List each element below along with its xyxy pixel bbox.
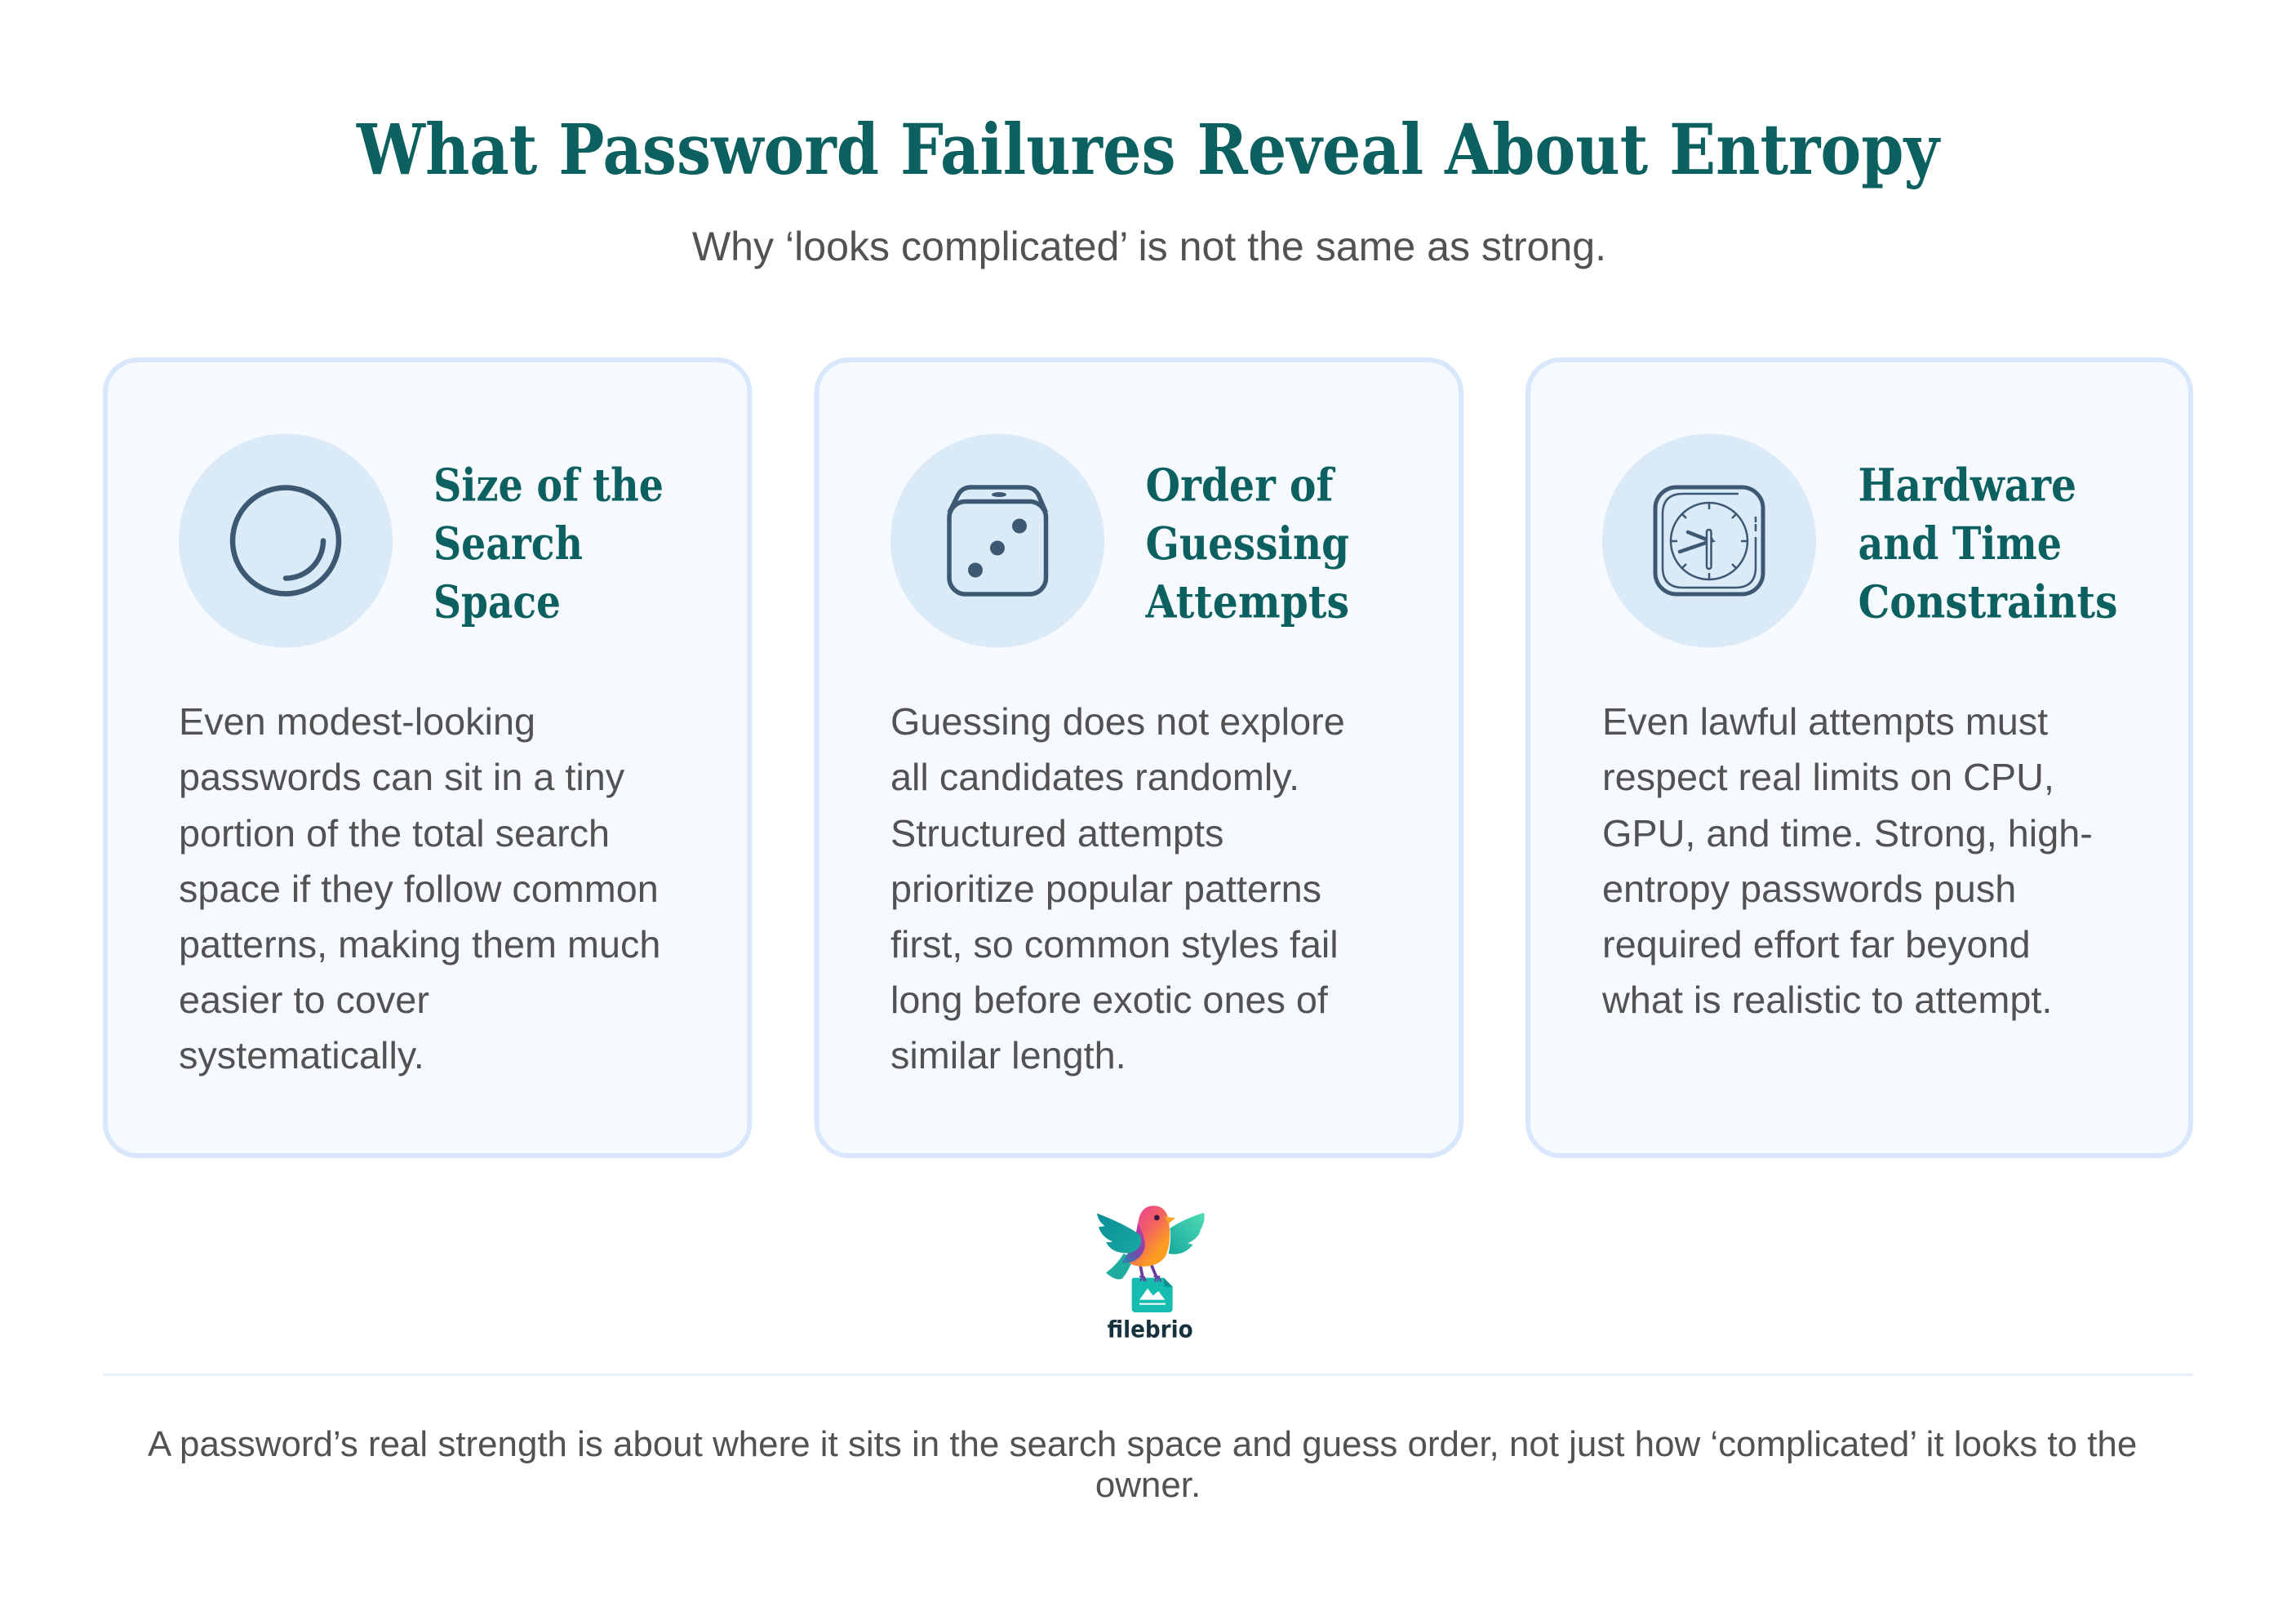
- text block: size of the search space: space if they follow common: [179, 868, 659, 910]
- panel: hardware and time constraints: [1528, 360, 2191, 1156]
- heading: order of guessing attempts: Order of: [1146, 459, 1335, 511]
- text block: order of guessing attempts: Guessing does not explore: [890, 700, 1345, 743]
- heading: hardware and time constraints: [1858, 459, 2117, 628]
- icon: clock: [1602, 434, 1816, 648]
- text block: size of the search space: portion of the total search: [179, 812, 610, 855]
- text block: order of guessing attempts: Structured attempts: [890, 812, 1223, 855]
- heading: hardware and time constraints: Hardware: [1858, 459, 2076, 511]
- icon: circle search space: [179, 434, 393, 648]
- subtitle: Why ‘looks complicated’ is not the same as strong.: [692, 224, 1606, 269]
- heading: size of the search space: [433, 459, 664, 628]
- text block: order of guessing attempts: prioritize popular patterns: [890, 868, 1321, 910]
- panel: order of guessing attempts: [816, 360, 1461, 1156]
- heading: order of guessing attempts: Attempts: [1145, 575, 1349, 628]
- heading: size of the search space: Search: [433, 517, 583, 570]
- heading: size of the search space: Space: [433, 575, 561, 628]
- text block: hardware and time constraints: required effort far beyond: [1602, 923, 2031, 966]
- text block: hardware and time constraints: what is realistic to attempt.: [1601, 979, 2052, 1021]
- text block: order of guessing attempts: similar length.: [890, 1034, 1126, 1077]
- heading: order of guessing attempts: [1145, 459, 1349, 628]
- text block: order of guessing attempts: first, so common styles fail: [890, 923, 1339, 966]
- logo: filebrio bird: filebrio: [1108, 1315, 1193, 1343]
- text block: order of guessing attempts: long before exotic ones of: [890, 979, 1329, 1021]
- text block: size of the search space: systematically.: [179, 1034, 424, 1077]
- title: What Password Failures Reveal About Entropy: [356, 109, 1941, 191]
- text block: size of the search space: patterns, making them much: [179, 923, 660, 966]
- heading: hardware and time constraints: and Time: [1858, 517, 2062, 570]
- text block: order of guessing attempts: [890, 700, 1345, 1077]
- text block: size of the search space: easier to cover: [179, 979, 429, 1021]
- text block: size of the search space: Even modest-looking: [179, 700, 535, 743]
- text block: hardware and time constraints: GPU, and time. Strong, high-: [1602, 812, 2093, 855]
- text block: order of guessing attempts: all candidates randomly.: [890, 756, 1299, 798]
- text block: size of the search space: [179, 700, 660, 1077]
- footer note: A password’s real strength is about where it sits in the search space and guess order, not just how ‘complicated’ it looks to the: [148, 1424, 2137, 1464]
- heading: hardware and time constraints: Constraints: [1858, 575, 2117, 628]
- icon: dice: [890, 434, 1104, 648]
- text block: hardware and time constraints: respect real limits on CPU,: [1602, 756, 2054, 798]
- heading: order of guessing attempts: Guessing: [1146, 517, 1349, 570]
- text block: hardware and time constraints: entropy passwords push: [1602, 868, 2016, 910]
- text block: size of the search space: passwords can sit in a tiny: [179, 756, 625, 798]
- footer note: owner.: [1095, 1465, 1201, 1505]
- panel: size of the search space: [105, 360, 749, 1156]
- footer note: [148, 1424, 2137, 1505]
- logo: filebrio bird: [1097, 1205, 1205, 1343]
- text block: hardware and time constraints: [1601, 700, 2093, 1021]
- text block: hardware and time constraints: Even lawful attempts must: [1602, 700, 2048, 743]
- heading: size of the search space: Size of the: [433, 459, 664, 511]
- divider: [103, 1374, 2193, 1376]
